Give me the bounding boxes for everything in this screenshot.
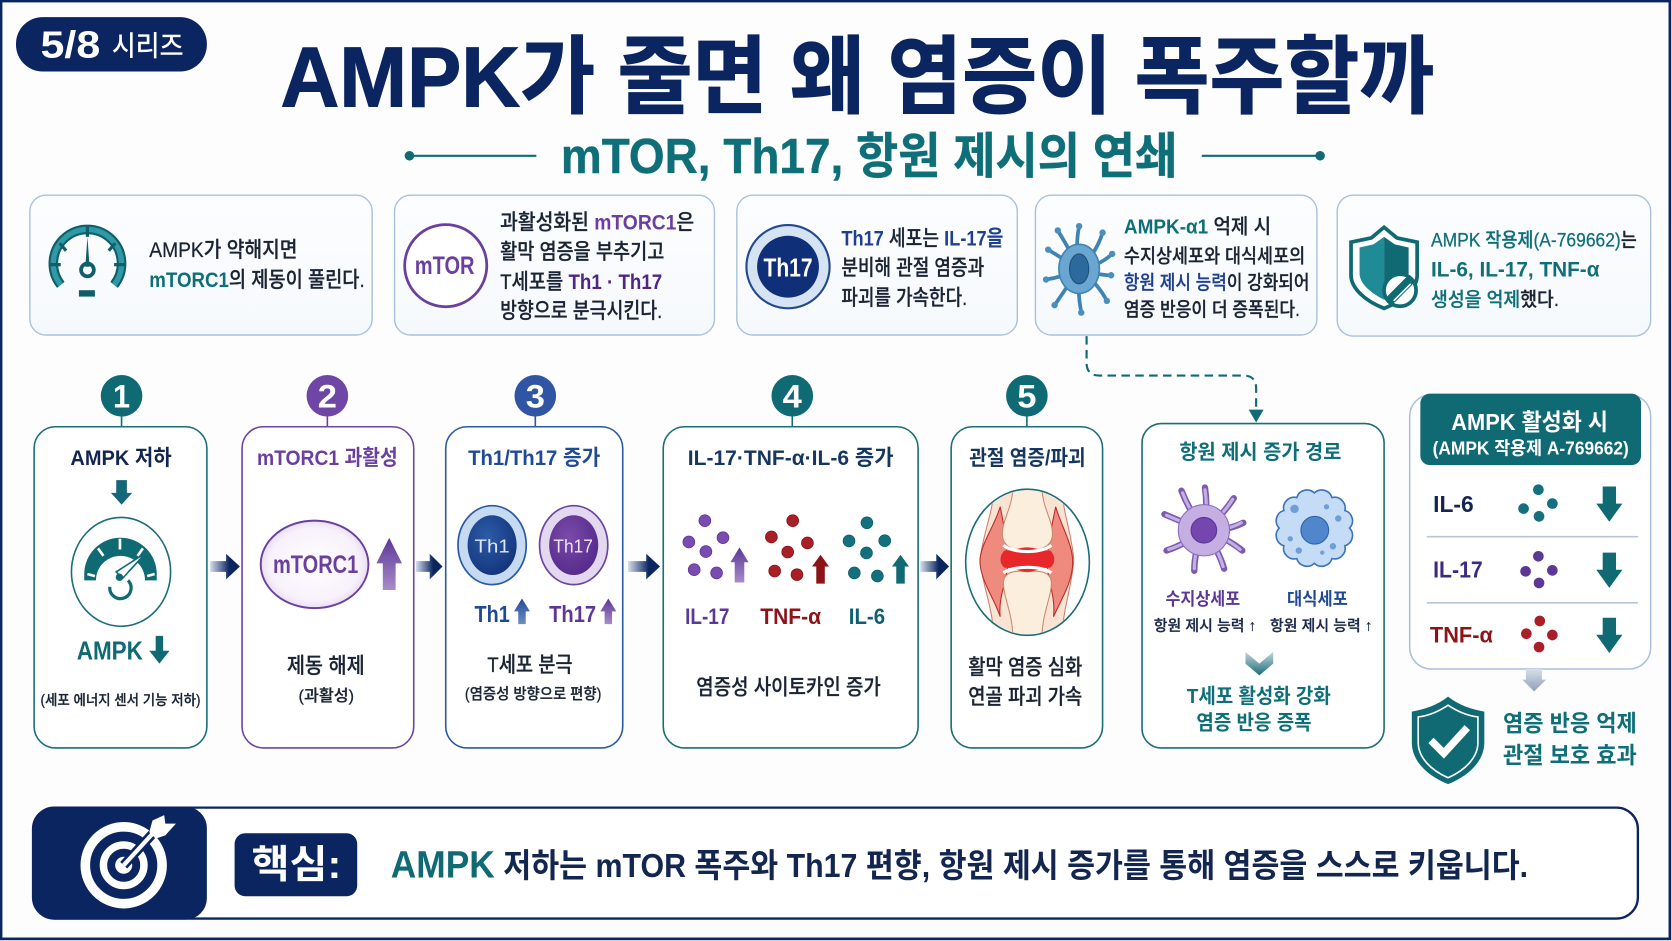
step 3 badge: 3 (526, 379, 545, 415)
text block: T세포 분극 (487, 653, 573, 677)
icon: Th17 cell: Th17 (553, 537, 593, 557)
text block (500, 210, 694, 323)
heading: 관절 염증/파괴 (969, 447, 1086, 470)
row: IL-17 (1433, 551, 1622, 588)
series badge: 시리즈 (112, 30, 183, 61)
row: TNF-a: TNF-α (1430, 622, 1493, 647)
icon: protective shield (1412, 697, 1484, 784)
text block: IL-6, IL-17, TNF-α (1431, 257, 1599, 281)
heading: AMPK 저하 (70, 446, 172, 470)
icon: Th1 cell: Th1 (475, 537, 510, 557)
header: (AMPK 작용제 A-769662) (1433, 438, 1629, 458)
key sentence: 저하는 mTOR 폭주와 Th17 편향, 항원 제시 증가를 통해 염증을 스스로 키웁니다. (503, 848, 1528, 885)
text block: 수지상세포와 대식세포의 (1124, 245, 1305, 267)
key label: 핵심: (252, 843, 341, 887)
chart: IL-17 dots (683, 515, 749, 583)
text block (287, 654, 365, 705)
row: IL-6 (1433, 484, 1622, 522)
series badge: 5/8 (41, 24, 100, 67)
header (1420, 394, 1641, 465)
key label (235, 833, 357, 896)
text block: 연골 파괴 가속 (968, 685, 1082, 709)
arrow: step 4 to 5 (920, 554, 949, 579)
step 5 badge: 5 (1017, 379, 1036, 415)
icon block: target (33, 807, 207, 920)
arrow: up (376, 538, 402, 590)
label: Th1 up: Th1 (475, 601, 510, 627)
icon: dendritic cell (1164, 488, 1243, 571)
arrow: step 2 to 3 (416, 554, 443, 579)
panel: AMPK-a1 suppression card (1035, 195, 1317, 335)
panel: antigen presentation path (1142, 424, 1384, 748)
text block: T세포 활성화 강화 (1187, 685, 1331, 708)
panel: step 2 mTORC1 overactivation (242, 427, 414, 748)
heading: Th1/Th17 증가 (468, 446, 601, 470)
text block: (염증성 방향으로 편향) (465, 685, 601, 703)
labels: IL-6 (849, 604, 885, 629)
text block: AMPK-α1 억제 시 (1124, 216, 1271, 239)
arrow: chevron (1245, 652, 1273, 675)
arrow: step 1 to 2 (210, 554, 240, 579)
heading: IL-17·TNF-α·IL-6 증가 (688, 446, 894, 470)
key sentence: AMPK (391, 844, 495, 887)
header: AMPK 활성화 시 (1451, 409, 1608, 435)
heading: mTORC1 과활성 (257, 446, 398, 470)
text block (465, 653, 601, 703)
icon: Th17 cell: Th17 (763, 254, 813, 282)
icon: gauge (50, 225, 125, 297)
icon: inflamed joint (966, 485, 1089, 640)
icon: mTOR circle (405, 225, 487, 307)
text block: 염증 반응 증폭 (1196, 712, 1312, 735)
arrow: dashed link to antigen path (1087, 336, 1264, 422)
icon: gauge in circle (71, 517, 171, 626)
text block: AMPK 작용제(A-769662)는 (1431, 229, 1637, 251)
chart: TNF-a dots (766, 515, 829, 584)
protection text: 염증 반응 억제 (1503, 710, 1637, 736)
caption: 염증성 사이토카인 증가 (696, 676, 881, 700)
label with arrow: AMPK (77, 637, 143, 665)
text block: (과활성) (299, 687, 354, 705)
row: IL-6: IL-6 (1433, 491, 1474, 517)
text block: T세포를 Th1 · Th17 (500, 270, 662, 294)
heading: 항원 제시 증가 경로 (1179, 441, 1341, 464)
step 1 badge: 1 (113, 379, 130, 415)
step 5 badge (1006, 375, 1048, 428)
panel: step 5 joint (951, 427, 1103, 748)
protection text: 관절 보호 효과 (1503, 742, 1637, 768)
text block: 방향으로 분극시킨다. (500, 299, 662, 323)
panel: AMPK activation (1410, 394, 1651, 669)
panel: AMPK agonist card (1337, 195, 1651, 336)
text block (1187, 685, 1331, 735)
text block (841, 226, 1003, 310)
text block: 활막 염증을 부추기고 (500, 240, 664, 264)
arrow: step 3 to 4 (628, 554, 660, 579)
step 2 badge: 2 (318, 379, 337, 415)
panel: step 4 cytokines (663, 427, 918, 748)
icon: Th1 cell (458, 506, 526, 585)
arrow: down (111, 480, 132, 505)
step 4 badge (771, 375, 813, 428)
series badge (16, 17, 207, 71)
labels: IL-17 (685, 604, 729, 629)
text block: Th17 세포는 IL-17을 (841, 226, 1003, 250)
subtitle with side rules: mTOR, Th17, 항원 제시의 연쇄 (561, 130, 1177, 184)
panel: key message bar (33, 807, 1638, 920)
text block (1431, 229, 1637, 311)
text block: 염증 반응이 더 증폭된다. (1124, 299, 1300, 321)
icon: mTORC1 bubble (261, 521, 368, 608)
labels: TNF-α (760, 604, 821, 629)
text block: 생성을 억제했다. (1431, 289, 1559, 311)
row: IL-17: IL-17 (1433, 557, 1483, 583)
step 2 badge (307, 375, 348, 428)
labels: dendritic cell: 수지상세포 (1165, 589, 1240, 609)
text block (968, 655, 1082, 709)
labels (685, 604, 885, 629)
text block (1124, 216, 1309, 321)
panel: Th17 card (737, 195, 1017, 335)
labels: macrophage (1270, 589, 1372, 635)
icon: macrophage (1276, 490, 1352, 566)
label: Th17 up: Th17 (549, 601, 596, 627)
step 1 badge (101, 375, 142, 428)
panel: step 3 Th1/Th17 increase (446, 427, 623, 748)
caption: (세포 에너지 센서 기능 저하) (41, 692, 200, 709)
protection text (1503, 710, 1637, 768)
icon: dendritic cell (1043, 223, 1115, 316)
labels: macrophage: 항원 제시 능력 ↑ (1270, 618, 1372, 635)
panel: mTORC1 card (395, 195, 714, 335)
labels: dendritic cell: 항원 제시 능력 ↑ (1154, 618, 1256, 635)
icon: mTOR circle: mTOR (415, 253, 475, 280)
icon: shield with pill (1351, 227, 1417, 308)
icon: Th17 cell (540, 506, 608, 585)
panel: step 1 AMPK decline (34, 427, 207, 748)
text block: 제동 해제 (287, 654, 365, 678)
step 3 badge (515, 375, 556, 428)
text block: 활막 염증 심화 (968, 655, 1082, 679)
text block: 과활성화된 mTORC1은 (500, 210, 694, 234)
text block: 항원 제시 능력이 강화되어 (1124, 272, 1309, 294)
text block: mTORC1의 제동이 풀린다. (149, 268, 365, 292)
labels: dendritic cell (1154, 589, 1256, 635)
text block: AMPK가 약해지면 (149, 238, 298, 262)
labels: macrophage: 대식세포 (1287, 589, 1348, 609)
icon: mTORC1 bubble: mTORC1 (273, 552, 358, 579)
text block: 파괴를 가속한다. (841, 286, 967, 310)
chart: IL-6 dots (843, 517, 909, 584)
title: AMPK가 줄면 왜 염증이 폭주할까 (280, 31, 1434, 126)
arrow: activation to protection (1522, 669, 1546, 691)
row: TNF-a (1430, 616, 1622, 653)
icon: Th17 cell (746, 225, 830, 308)
text block: 분비해 관절 염증과 (841, 256, 984, 280)
label: Th1 up (475, 599, 530, 627)
text block (149, 238, 365, 292)
step 4 badge: 4 (783, 379, 802, 415)
panel: AMPK weakened card (30, 195, 372, 335)
